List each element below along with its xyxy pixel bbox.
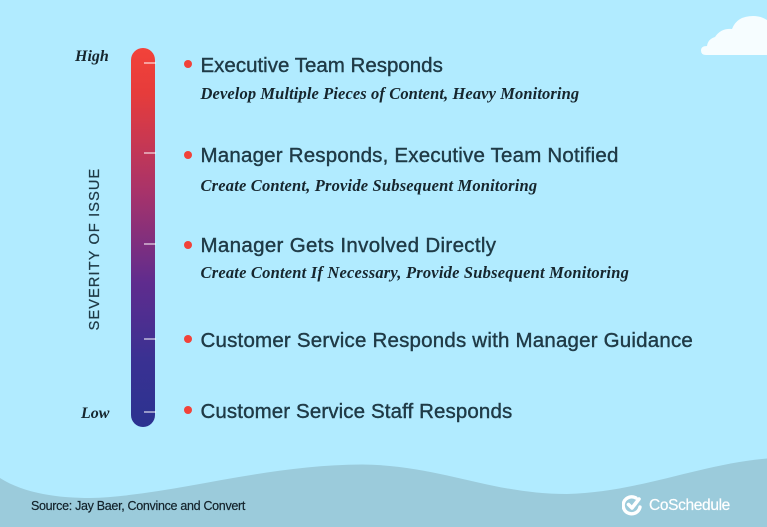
level 2: manager responds: Manager Responds, Executive Team Notified — [200, 144, 619, 167]
level 4: customer service with guidance: Customer Service Responds with Manager Guidance — [200, 328, 693, 352]
axis title: severity of issue: SEVERITY OF ISSUE — [87, 168, 103, 330]
level 1: executive team: Develop Multiple Pieces of Content, Heavy Monitoring — [200, 84, 579, 102]
axis label: Low: Low — [81, 405, 109, 422]
logo: CoSchedule — [622, 495, 730, 516]
icon: cloud — [701, 16, 767, 55]
footer wave — [0, 458, 767, 527]
source text: Source: Jay Baer, Convince and Convert — [31, 499, 245, 513]
level 2: manager responds: Create Content, Provide Subsequent Monitoring — [200, 176, 537, 194]
icon: logo mark — [622, 495, 642, 516]
level 5: customer service staff: Customer Service Staff Responds — [200, 400, 512, 422]
level 3: manager involved: Create Content If Necessary, Provide Subsequent Monitoring — [200, 262, 629, 282]
logo wordmark: CoSchedule — [649, 497, 730, 514]
level 2: manager responds — [184, 144, 619, 194]
level 3: manager involved: Manager Gets Involved Directly — [200, 234, 496, 257]
severity gradient bar — [130, 48, 155, 427]
axis label: High: High — [75, 48, 109, 65]
level 3: manager involved — [184, 234, 629, 282]
level 1: executive team: Executive Team Responds — [200, 54, 443, 77]
level 1: executive team — [184, 54, 579, 102]
